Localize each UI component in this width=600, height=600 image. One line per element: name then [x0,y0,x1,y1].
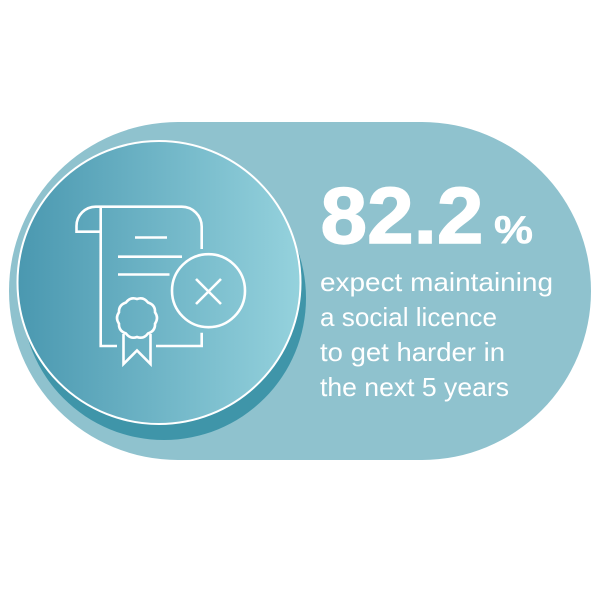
circle drop shadow [22,156,306,440]
icon: document text lines [118,238,182,274]
icon: certificate with cross [76,207,245,364]
icon: rosette seal [117,298,157,338]
description text: a social licence [320,302,497,332]
description text [320,267,553,402]
statistic: 82.2%: % [494,209,533,252]
icon: ribbon [124,334,150,364]
description text: to get harder in [320,337,505,367]
description text: expect maintaining [320,267,553,297]
icon: cross in circle [172,254,245,327]
gradient circle with white outline [18,141,300,424]
icon: scroll document outline [76,207,202,346]
statistic: 82.2%: 82.2 [320,171,484,260]
background pill panel [9,122,591,460]
description text: the next 5 years [320,372,509,402]
